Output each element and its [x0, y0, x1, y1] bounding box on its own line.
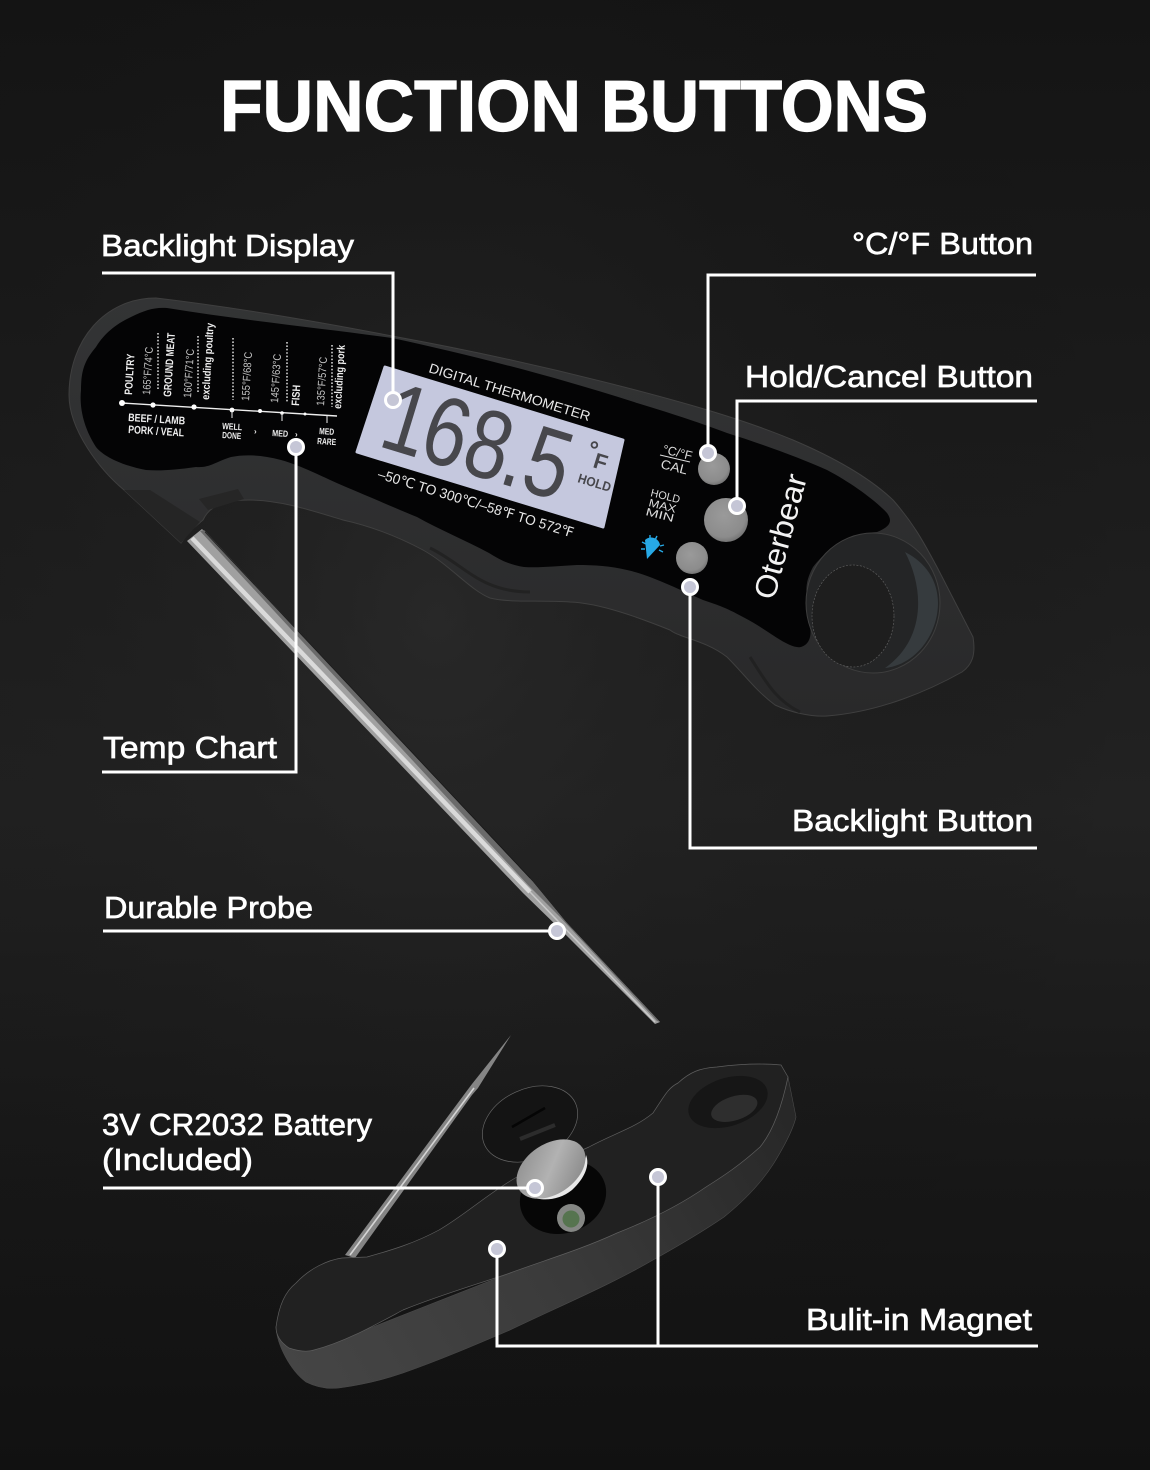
screen panel: [357, 367, 623, 527]
chart vertical labels: excluding poultry: [200, 322, 217, 400]
button labels: [644, 442, 694, 525]
chart horizontal labels: MED: [272, 428, 289, 439]
title: FUNCTION: [220, 67, 581, 147]
button labels: MAX: [647, 497, 678, 516]
hold indicator: HOLD: [576, 471, 613, 495]
probe: [187, 529, 660, 1024]
chart horizontal labels: WELL: [222, 421, 243, 432]
button labels: CAL: [659, 456, 689, 477]
chart vertical labels: 165°F/74°C: [141, 346, 156, 395]
title: [220, 67, 928, 147]
callout: durable probe: Durable Probe: [104, 890, 313, 925]
chart vertical labels: [123, 322, 348, 409]
screen captions: [376, 361, 592, 541]
callout: magnet: [490, 1170, 1038, 1346]
callout: battery: (Included): [102, 1142, 253, 1177]
top face: [276, 1064, 788, 1351]
chart horizontal labels: ›: [254, 427, 257, 436]
second view: magnet back: [276, 1064, 796, 1388]
callout: unit button: [700, 226, 1036, 460]
button labels: °C/°F: [661, 442, 694, 463]
chart horizontal labels: ›: [295, 430, 298, 439]
icon: backlight bulb: [641, 535, 664, 559]
callout: backlight button: Backlight Button: [792, 803, 1033, 838]
chart vertical labels: 145°F/63°C: [269, 353, 284, 403]
unit letter: F: [591, 448, 611, 476]
screen captions: DIGITAL THERMOMETER: [427, 361, 592, 424]
chart vertical labels: excluding pork: [332, 344, 348, 409]
callout: durable probe: [103, 890, 564, 938]
chart vertical labels: GROUND MEAT: [162, 332, 178, 397]
battery socket: [509, 1148, 617, 1246]
thermometer body: [69, 298, 974, 716]
temperature reading: 168.5: [370, 361, 585, 521]
temp chart: [119, 322, 348, 447]
callout: battery: 3V CR2032 Battery: [102, 1107, 372, 1142]
coin battery: [506, 1127, 596, 1211]
chart axis: [119, 333, 337, 423]
callout: hold button: Hold/Cancel Button: [745, 359, 1033, 394]
chart vertical labels: 155°F/68°C: [240, 351, 255, 401]
chart horizontal labels: RARE: [317, 436, 336, 447]
chart vertical labels: POULTRY: [123, 353, 138, 395]
second view: pin: [345, 1035, 511, 1258]
neck notch: [199, 489, 244, 510]
magnet hole: [682, 1067, 774, 1137]
chart vertical labels: 160°F/71°C: [182, 348, 197, 398]
brand name: Oterbear: [747, 470, 814, 603]
degree symbol: °: [584, 436, 601, 465]
body shell: [69, 298, 974, 716]
body shadows: [430, 548, 800, 712]
callout: backlight display: Backlight Display: [101, 228, 355, 263]
lcd screen: [357, 361, 623, 527]
title: BUTTONS: [601, 67, 928, 147]
chart horizontal labels: [128, 412, 336, 447]
battery cover: [470, 1071, 590, 1177]
callout: backlight button: [682, 580, 1037, 848]
button labels: HOLD: [649, 487, 681, 506]
callout: hold button: [730, 359, 1037, 514]
callout: unit button: °C/°F Button: [852, 226, 1033, 261]
callout: battery: [102, 1107, 542, 1196]
chart horizontal labels: BEEF / LAMB: [128, 412, 185, 427]
chart horizontal labels: DONE: [222, 430, 241, 441]
callout: temp chart: [102, 440, 304, 772]
neck tip: [124, 490, 200, 543]
chart horizontal labels: MED: [319, 426, 335, 437]
callout: magnet: Bulit-in Magnet: [806, 1302, 1032, 1337]
function buttons: [676, 453, 748, 574]
screen captions: –50℃ TO 300℃/–58℉ TO 572℉: [376, 466, 576, 541]
callout: backlight display: [101, 228, 400, 408]
chart vertical labels: 135°F/57°C: [315, 356, 330, 406]
loop hole: [806, 533, 940, 673]
black face: [81, 308, 890, 647]
callout: temp chart: Temp Chart: [103, 730, 277, 765]
chart vertical labels: FISH: [290, 384, 303, 406]
chart horizontal labels: PORK / VEAL: [128, 424, 185, 439]
button labels: MIN: [644, 506, 675, 525]
side wall: [276, 1077, 796, 1388]
